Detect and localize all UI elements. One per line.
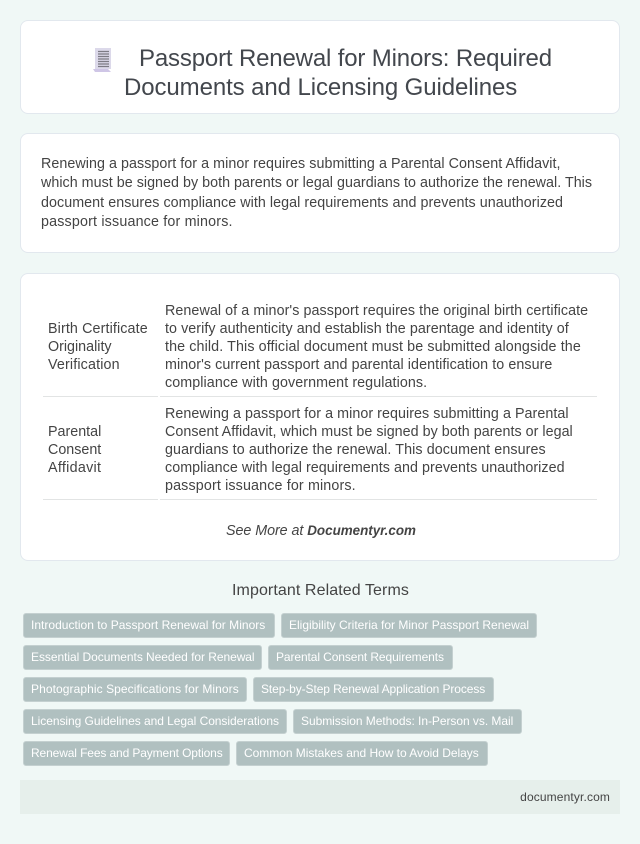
row label: Parental Consent [48, 424, 102, 476]
row label: Birth Certificate: Verification [48, 357, 120, 373]
row text: Parental Consent: Renewing a passport for a minor requires submitting a Parental [165, 406, 569, 422]
row label: Parental Consent: Affidavit [48, 460, 101, 476]
intro paragraph: document ensures compliance with legal requirements and prevents unauthorized [41, 195, 563, 211]
row label: Birth Certificate: Originality [48, 339, 112, 355]
title: Passport Renewal for Minors: Required [139, 45, 552, 72]
icon: document receipt [93, 48, 111, 72]
tag list [23, 613, 537, 766]
tag list: Licensing Guidelines and Legal Considerations [31, 714, 279, 728]
row text: Birth Certificate: to verify authenticity and establish the parentage and identity of [165, 321, 569, 337]
row label: Birth Certificate: Birth Certificate [48, 321, 148, 337]
tag list: Step-by-Step Renewal Application Process [261, 682, 485, 696]
intro paragraph: Renewing a passport for a minor requires submitting a Parental Consent Affidavit, [41, 156, 561, 172]
footer bar [20, 780, 620, 814]
row text: Birth Certificate: minor's current passport and parental identification to ensure [165, 357, 552, 373]
title: Documents and Licensing Guidelines [124, 74, 517, 101]
row text: Birth Certificate [165, 303, 588, 391]
footer bar: documentyr.com [520, 790, 610, 804]
intro paragraph: passport issuance for minors. [41, 214, 233, 230]
row label: Parental Consent: Consent [48, 442, 101, 458]
row text: Parental Consent [165, 406, 573, 494]
row text: Birth Certificate: compliance with government regulations. [165, 375, 427, 391]
heading: related terms: Important Related Terms [232, 582, 409, 599]
tag list: Introduction to Passport Renewal for Minors [31, 618, 265, 632]
panel: document table [20, 273, 620, 561]
tag list: Eligibility Criteria for Minor Passport Renewal [289, 618, 529, 632]
row label: Parental Consent: Parental [48, 424, 101, 440]
tag list: Photographic Specifications for Minors [31, 682, 239, 696]
intro paragraph [41, 156, 592, 230]
tag list: Submission Methods: In-Person vs. Mail [301, 714, 513, 728]
row text: Parental Consent: compliance with legal requirements and prevents unauthorized [165, 460, 565, 476]
tag list: Parental Consent Requirements [276, 650, 444, 664]
see more link: See More at Documentyr.com [226, 523, 416, 539]
tag list: Essential Documents Needed for Renewal [31, 650, 255, 664]
header card [20, 20, 620, 114]
row text: Parental Consent: guardians to authorize the renewal. This document ensures [165, 442, 546, 458]
title [124, 45, 552, 101]
row text: Parental Consent: passport issuance for minors. [165, 478, 356, 494]
row text: Parental Consent: Consent Affidavit, which must be signed by both parents or legal [165, 424, 573, 440]
row label: Birth Certificate [48, 321, 148, 373]
row text: Birth Certificate: the child. This official document must be submitted alongside the [165, 339, 581, 355]
panel: intro text [20, 133, 620, 253]
tag list: Renewal Fees and Payment Options [31, 746, 223, 760]
row text: Birth Certificate: Renewal of a minor's passport requires the original birth certificate [165, 303, 588, 319]
tag list: Common Mistakes and How to Avoid Delays [244, 746, 479, 760]
intro paragraph: which must be signed by both parents or legal guardians to authorize the renewal. This [41, 175, 592, 191]
